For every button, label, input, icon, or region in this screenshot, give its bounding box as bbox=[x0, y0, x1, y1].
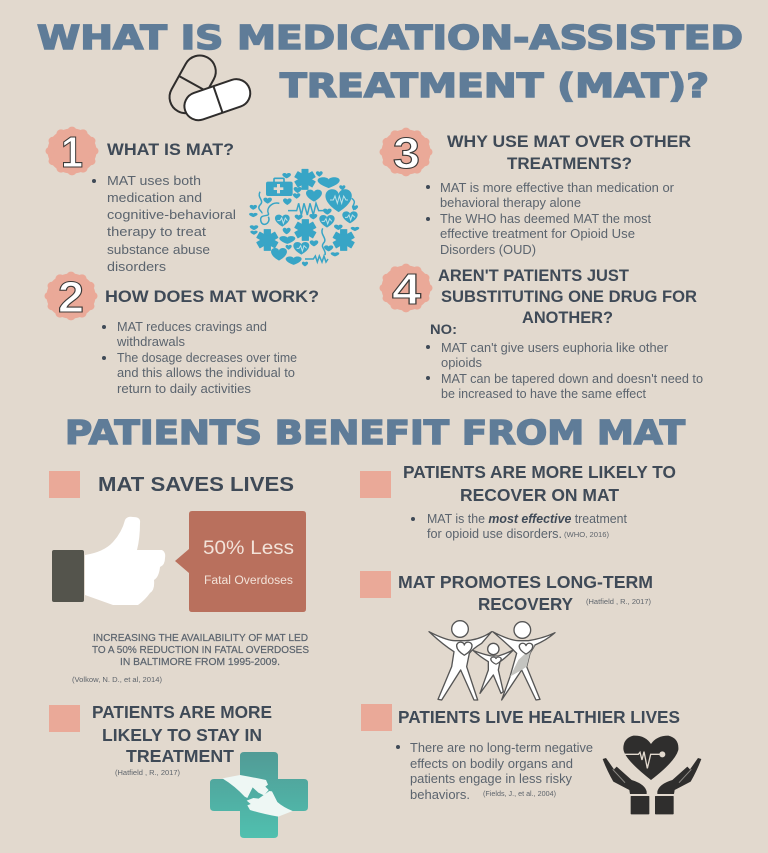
panel: section 1 what is MAT bbox=[46, 127, 359, 274]
citation: (Hatfield , R., 2017) bbox=[586, 599, 651, 606]
heading: PATIENTS ARE MORE bbox=[92, 702, 272, 722]
title bbox=[37, 19, 743, 105]
heading 4: SUBSTITUTING ONE DRUG FOR bbox=[441, 287, 697, 306]
square marker bbox=[49, 705, 80, 732]
heading 3 bbox=[447, 132, 691, 173]
panel: section 4 substituting bbox=[380, 264, 703, 401]
heading bbox=[398, 572, 653, 614]
text block: There are no long-term negative bbox=[410, 740, 593, 755]
text block 2: The dosage decreases over time bbox=[117, 350, 297, 365]
number badge 4 bbox=[380, 264, 432, 314]
callout: 50% less bbox=[175, 511, 306, 612]
title: TREATMENT (MAT)? bbox=[280, 67, 709, 105]
citation: (Volkow, N. D., et al, 2014) bbox=[72, 677, 162, 684]
text block bbox=[411, 511, 627, 541]
panel: more likely to recover bbox=[360, 462, 676, 541]
number badge 1: 1 bbox=[61, 128, 83, 177]
text block 2: return to daily activities bbox=[117, 381, 251, 396]
text block 1: therapy to treat bbox=[107, 224, 206, 239]
text block 1: disorders bbox=[107, 259, 167, 274]
label: no: NO: bbox=[430, 321, 457, 337]
text block 2: and this allows the individual to bbox=[117, 365, 295, 380]
title: WHAT IS MEDICATION-ASSISTED bbox=[37, 19, 743, 57]
text block 2 bbox=[102, 319, 297, 396]
text block 3: effective treatment for Opioid Use bbox=[440, 226, 635, 241]
text block bbox=[396, 740, 593, 802]
text block: patients engage in less risky bbox=[410, 771, 572, 786]
text block 3: Disorders (OUD) bbox=[440, 242, 536, 257]
number badge 3 bbox=[380, 128, 432, 178]
heading bbox=[92, 702, 272, 766]
heading 3: WHY USE MAT OVER OTHER bbox=[447, 132, 691, 151]
heading: PATIENTS LIVE HEALTHIER LIVES bbox=[398, 707, 680, 727]
heading: PATIENTS ARE MORE LIKELY TO bbox=[403, 462, 676, 482]
text block 4 bbox=[426, 340, 703, 401]
text block 4: be increased to have the same effect bbox=[441, 386, 646, 401]
number badge 1 bbox=[46, 127, 98, 177]
text block 1 bbox=[92, 173, 236, 274]
icon: pills bbox=[164, 50, 254, 124]
heading: LIKELY TO STAY IN bbox=[102, 725, 262, 745]
panel: section 3 why use MAT bbox=[380, 128, 691, 257]
text block: Baltimore: INCREASING THE AVAILABILITY OF MAT LED bbox=[93, 632, 308, 644]
text block 4: opioids bbox=[441, 355, 482, 370]
text block: behaviors. bbox=[410, 787, 470, 802]
number badge 2 bbox=[44, 272, 98, 322]
text block 3 bbox=[426, 180, 675, 257]
text block: (WHO, 2016) bbox=[564, 532, 609, 539]
heading: MAT SAVES LIVES bbox=[98, 474, 294, 496]
text block 1: substance abuse bbox=[107, 242, 210, 257]
heading 4: ANOTHER? bbox=[522, 308, 613, 327]
panel: patients stay in treatment bbox=[49, 702, 308, 838]
icon: medical cross with hands bbox=[210, 752, 308, 838]
panel: MAT saves lives bbox=[49, 471, 309, 684]
text block 2: MAT reduces cravings and bbox=[117, 319, 267, 334]
text block 1: medication and bbox=[107, 190, 202, 205]
heading: RECOVERY bbox=[478, 594, 573, 614]
text block 3: MAT is more effective than medication or bbox=[440, 180, 675, 195]
heading: MAT PROMOTES LONG-TERM bbox=[398, 572, 653, 592]
callout: 50% less: Fatal Overdoses bbox=[204, 575, 293, 587]
icon: family bbox=[429, 621, 555, 700]
heading bbox=[403, 462, 676, 505]
text block: (Fields, J., et al., 2004) bbox=[483, 791, 556, 798]
panel: long-term recovery bbox=[360, 571, 653, 700]
heading: TREATMENT bbox=[126, 746, 234, 766]
text block 1: MAT uses both bbox=[107, 173, 201, 188]
text block: for opioid use disorders. bbox=[427, 526, 562, 541]
section title: patients benefit: PATIENTS BENEFIT FROM MAT bbox=[65, 414, 685, 452]
text block 3: behavioral therapy alone bbox=[440, 195, 581, 210]
heading 4: AREN'T PATIENTS JUST bbox=[438, 266, 630, 285]
square marker bbox=[360, 571, 391, 598]
text block 4: MAT can't give users euphoria like other bbox=[441, 340, 669, 355]
panel: healthier lives bbox=[361, 704, 701, 814]
number badge 3: 3 bbox=[393, 129, 420, 178]
text block: Baltimore bbox=[92, 632, 309, 668]
text block 3: The WHO has deemed MAT the most bbox=[440, 211, 651, 226]
icon: medical circle bbox=[249, 169, 359, 266]
text block: Baltimore: IN BALTIMORE FROM 1995-2009. bbox=[120, 656, 280, 668]
text block: Baltimore: TO A 50% REDUCTION IN FATAL OVERDOSES bbox=[92, 644, 309, 656]
heading 4 bbox=[438, 266, 697, 327]
number badge 4: 4 bbox=[392, 265, 422, 314]
panel: section 2 how does MAT work bbox=[44, 272, 319, 396]
heading 1: WHAT IS MAT? bbox=[107, 140, 234, 159]
square marker bbox=[361, 704, 392, 731]
text block 2: withdrawals bbox=[116, 334, 185, 349]
citation: (Hatfield , R., 2017) bbox=[115, 770, 180, 777]
heading 2: HOW DOES MAT WORK? bbox=[105, 287, 319, 306]
square marker bbox=[49, 471, 80, 498]
icon: heart in hands bbox=[603, 736, 701, 814]
text block: effects on bodily organs and bbox=[410, 756, 573, 771]
heading: RECOVER ON MAT bbox=[460, 485, 619, 505]
callout: 50% less: 50% Less bbox=[203, 538, 294, 559]
heading 3: TREATMENTS? bbox=[507, 154, 632, 173]
text block: MAT is the most effective treatment bbox=[427, 511, 627, 526]
text block 4: MAT can be tapered down and doesn't need to bbox=[441, 371, 703, 386]
icon: thumbs up bbox=[52, 517, 165, 605]
number badge 2: 2 bbox=[58, 273, 84, 322]
text block 1: cognitive-behavioral bbox=[107, 207, 236, 222]
square marker bbox=[360, 471, 391, 498]
